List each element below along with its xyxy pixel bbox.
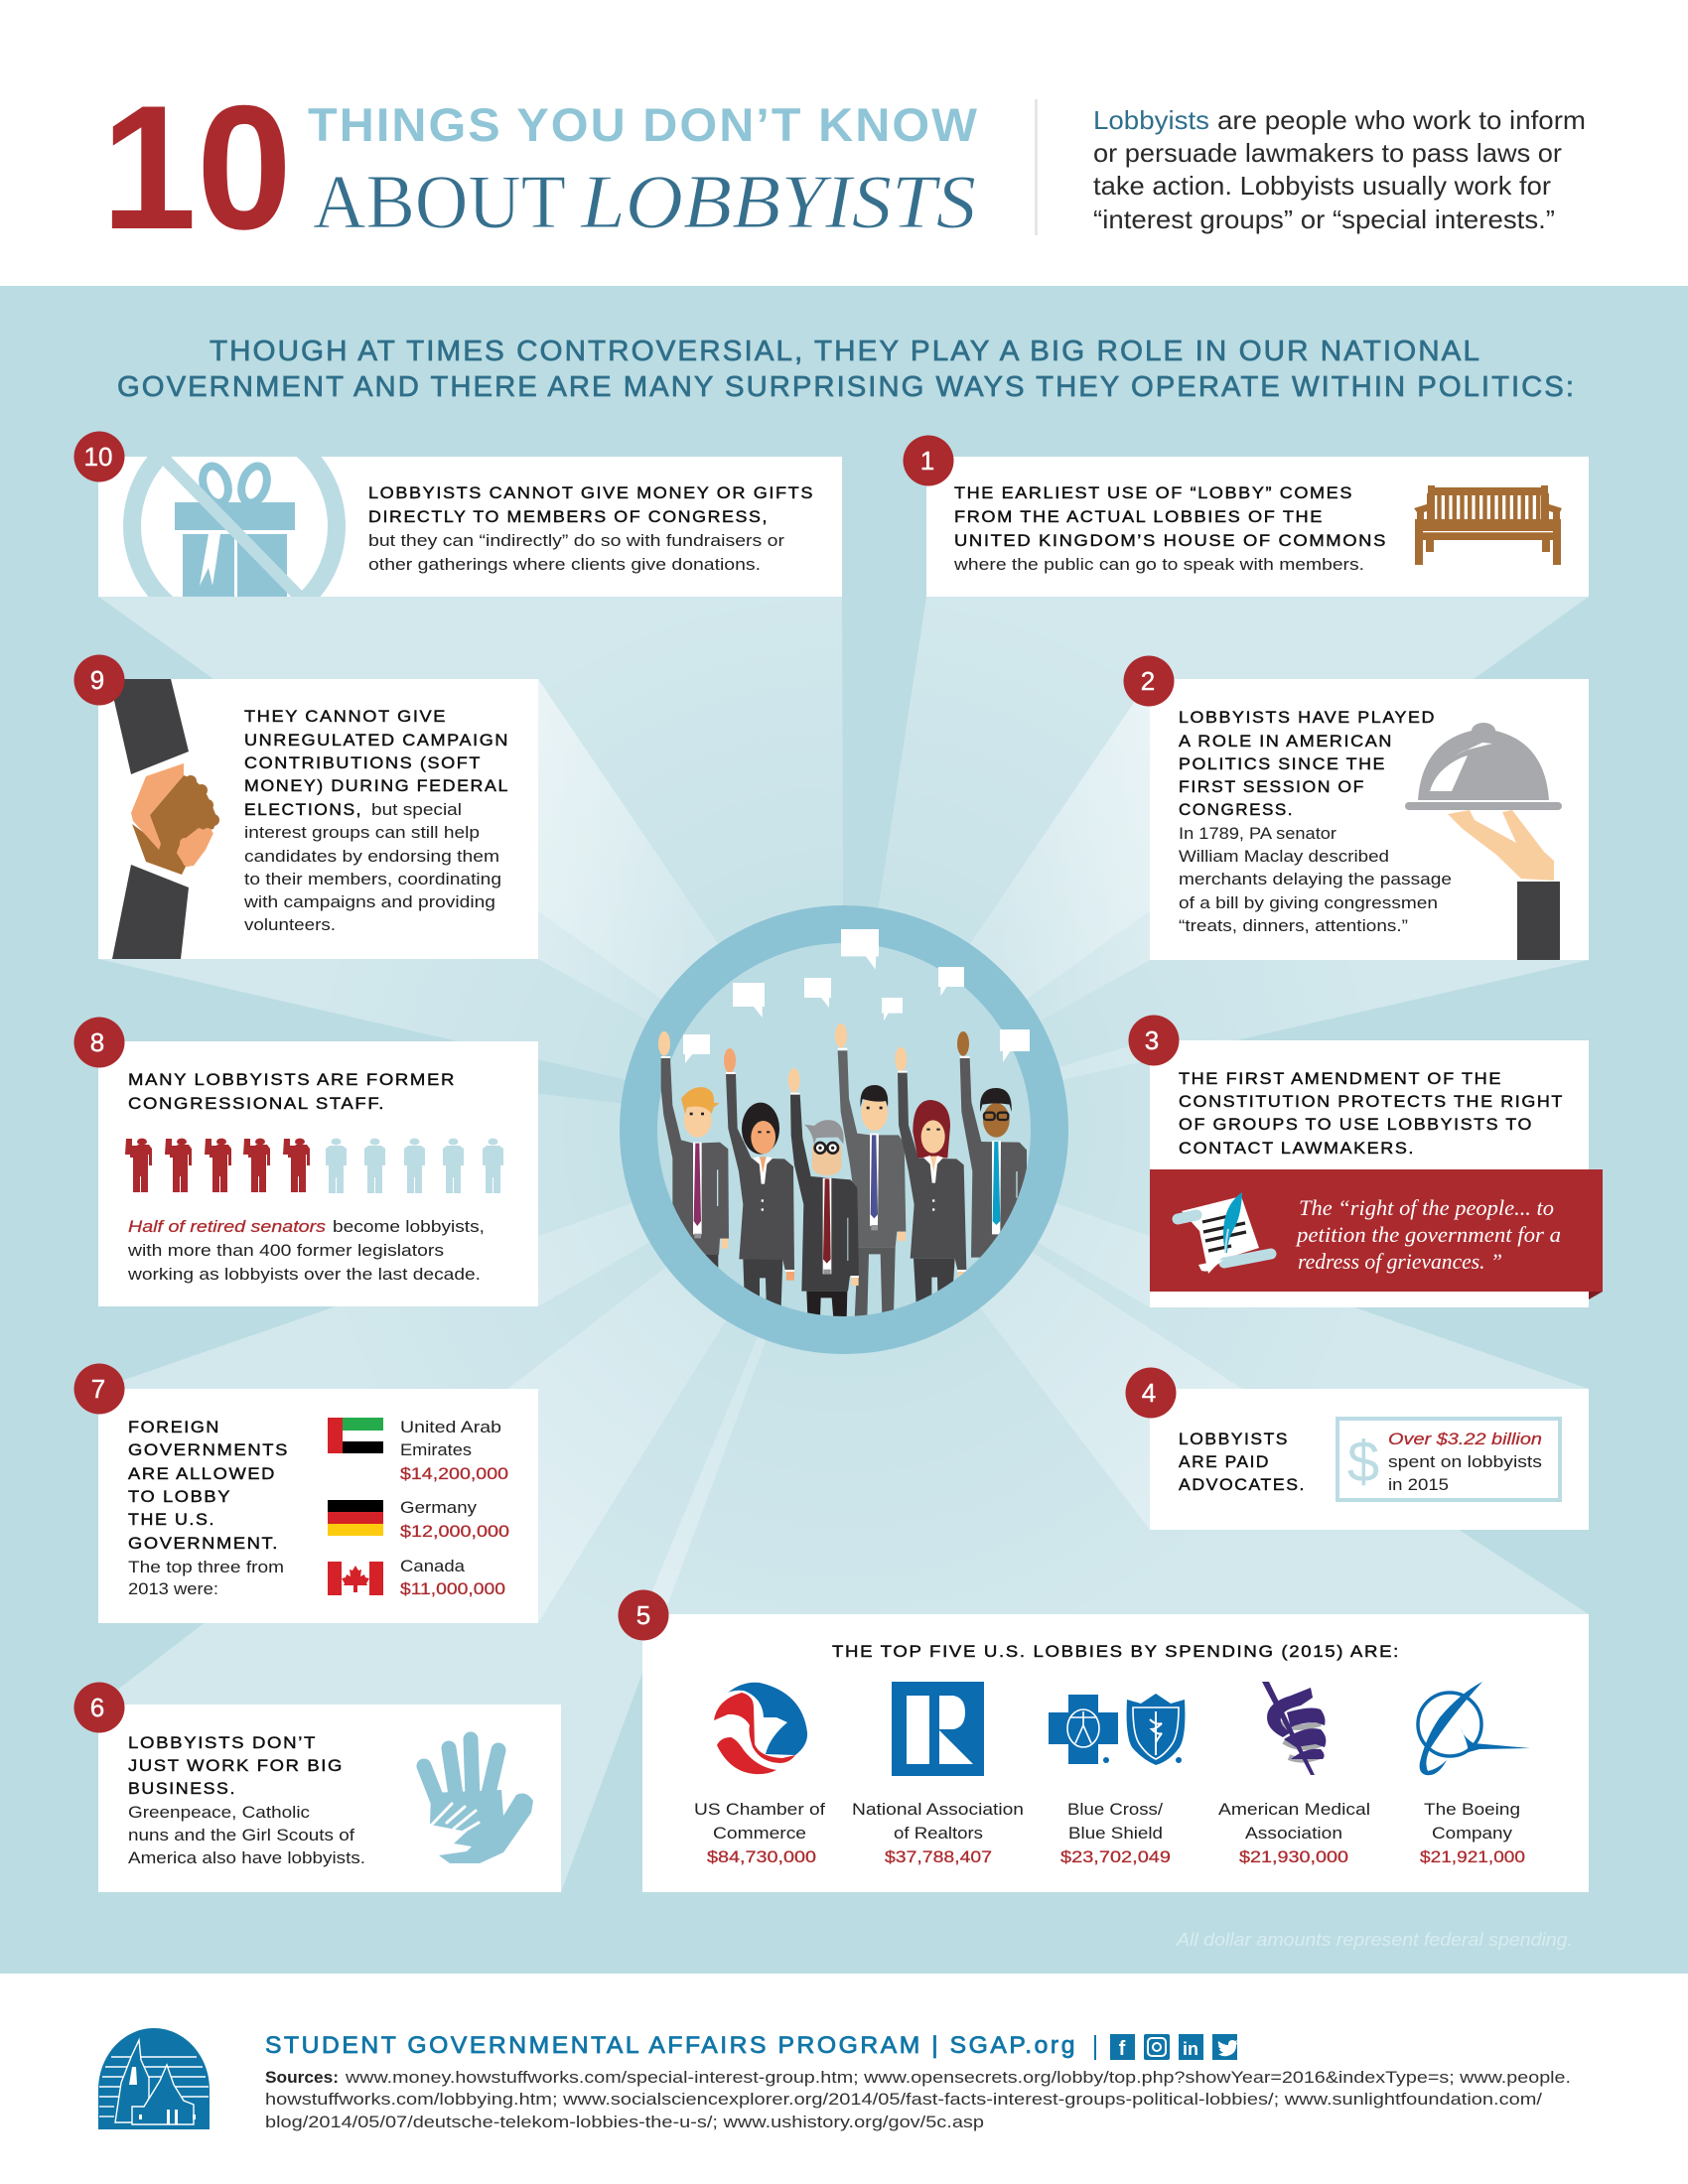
logo: US Chamber of Commerce: [714, 1683, 807, 1774]
speech bubbles: [683, 929, 1030, 1063]
country spending list: Canada: [400, 1558, 466, 1575]
badge 2: 2: [1141, 666, 1155, 696]
panel 7 text: TO LOBBY: [128, 1487, 231, 1506]
figure with teal tie and glasses: [957, 1031, 1027, 1258]
panel 2 text: William Maclay described: [1179, 848, 1389, 866]
panel 4 heading: ARE PAID: [1179, 1452, 1270, 1471]
panel 1: origin of lobby: [904, 435, 1589, 597]
badge 4: 4: [1142, 1378, 1156, 1408]
icon: facebook: f: [1119, 2038, 1126, 2060]
lobby names and spending: US Chamber of: [694, 1801, 825, 1819]
panel 8 text: with more than 400 former legislators: [127, 1242, 444, 1260]
panel 9 text: but special: [371, 801, 462, 819]
woman with red hair: [895, 1047, 966, 1303]
panel 9 text: with campaigns and providing: [243, 893, 495, 911]
panel 1 text: where the public can go to speak with members.: [953, 556, 1364, 574]
country spending list: [400, 1419, 509, 1598]
icon: twitter: [1212, 2034, 1238, 2060]
flag: Germany: [328, 1500, 383, 1536]
panel 3 text: CONTACT LAWMAKERS.: [1179, 1139, 1415, 1158]
panel 7 text: FOREIGN: [128, 1418, 220, 1436]
panel 7 text: [128, 1418, 289, 1598]
panel 2 text: CONGRESS.: [1179, 800, 1294, 819]
lobby names and spending: of Realtors: [894, 1825, 983, 1843]
panel 8 text: Half of retired senators: [128, 1217, 327, 1236]
panel 9 text: CONTRIBUTIONS (SOFT: [244, 753, 482, 772]
lobby names and spending: The Boeing: [1424, 1801, 1520, 1819]
panel 3 text: CONSTITUTION PROTECTS THE RIGHT: [1179, 1092, 1564, 1111]
panel 1 text: [953, 483, 1387, 574]
panel 6 text: JUST WORK FOR BIG: [128, 1756, 344, 1775]
flag: Canada: [328, 1562, 383, 1595]
panel 8 heading: CONGRESSIONAL STAFF.: [128, 1094, 385, 1113]
badge 5: 5: [636, 1600, 650, 1630]
panel 4: paid advocates: [1126, 1368, 1589, 1530]
panel 7 text: 2013 were:: [128, 1580, 218, 1598]
badge 5: [618, 1590, 669, 1640]
icon: hands: [424, 1739, 533, 1863]
lobby names and spending: Blue Cross/: [1067, 1801, 1163, 1819]
panel 2 text: In 1789, PA senator: [1179, 825, 1337, 843]
country spending list: Germany: [400, 1499, 478, 1517]
panel 1 text: THE EARLIEST USE OF “LOBBY” COMES: [954, 483, 1353, 502]
panel 9 text: volunteers.: [244, 916, 336, 934]
sources: howstuffworks.com/lobbying.htm; www.socialsciencexplorer.org/2014/05/fast-facts-interest-groups-political-lobbies/; www.sunlightfoundation.com/: [265, 2091, 1543, 2109]
title line: things you don't know: THINGS YOU DON’T KNOW: [308, 98, 979, 151]
panel 8 heading: MANY LOBBYISTS ARE FORMER: [128, 1070, 456, 1089]
logo: Blue Cross Blue Shield: [1049, 1694, 1185, 1765]
lobby names and spending: Company: [1432, 1825, 1513, 1843]
panel 2: history: [1124, 655, 1589, 960]
panel 6 text: [128, 1733, 365, 1867]
panel 2 text: merchants delaying the passage: [1179, 871, 1452, 888]
panel 4 heading: LOBBYISTS: [1179, 1430, 1289, 1448]
section heading: THOUGH AT TIMES CONTROVERSIAL, THEY PLAY A BIG ROLE IN OUR NATIONAL: [210, 336, 1481, 367]
quotation: petition the government for a: [1295, 1222, 1561, 1247]
icon: scroll and quill: [1178, 1192, 1271, 1274]
title line: about lobbyists: LOBBYISTS: [580, 159, 976, 244]
lobby names and spending: [694, 1801, 1525, 1866]
badge 1: [904, 435, 953, 486]
panel 9 text: ELECTIONS,: [244, 800, 362, 819]
figure with blond hair: [658, 1031, 729, 1271]
panel 2 text: [1179, 708, 1452, 935]
panel 7: foreign governments: [73, 1364, 538, 1623]
callout: spending total: [1337, 1419, 1560, 1500]
lobby names and spending: National Association: [852, 1801, 1024, 1819]
panel 2 text: LOBBYISTS HAVE PLAYED: [1179, 708, 1436, 727]
panel 10 text: DIRECTLY TO MEMBERS OF CONGRESS,: [368, 507, 769, 526]
panel 3: first amendment: [1128, 1015, 1603, 1307]
title line: about lobbyists: [313, 159, 976, 244]
badge 7: 7: [91, 1374, 105, 1404]
country spending list: $12,000,000: [400, 1522, 509, 1541]
icon: facebook: [1110, 2034, 1135, 2060]
panel 9 text: candidates by endorsing them: [244, 848, 499, 866]
country spending list: $11,000,000: [400, 1579, 505, 1598]
lobby names and spending: $23,702,049: [1060, 1847, 1171, 1866]
panel 6 text: BUSINESS.: [128, 1779, 236, 1798]
panel 7 text: GOVERNMENT.: [128, 1534, 279, 1553]
background rays: [98, 597, 1589, 1892]
lobby names and spending: American Medical: [1218, 1801, 1370, 1819]
section heading: [117, 336, 1576, 403]
center man with gray hair and glasses: [788, 1068, 859, 1318]
panel 9 text: MONEY) DURING FEDERAL: [244, 776, 509, 795]
country spending list: $14,200,000: [400, 1464, 508, 1483]
panel 9: soft money: [73, 655, 538, 959]
intro text: Lobbyists: [1093, 105, 1209, 135]
panel 6 text: LOBBYISTS DON’T: [128, 1733, 317, 1752]
lobby names and spending: $84,730,000: [707, 1847, 816, 1866]
badge 3: 3: [1145, 1025, 1159, 1055]
panel 4 heading: [1179, 1430, 1306, 1494]
panel 6: not just big business: [73, 1682, 561, 1892]
icon: linkedin: in: [1183, 2039, 1198, 2059]
sources: Sources:: [265, 2069, 339, 2087]
header: [101, 68, 1586, 266]
sources: www.money.howstuffworks.com/special-interest-group.htm; www.opensecrets.org/lobby/top.php?showYear=2016&indexType=s; www.people.: [345, 2069, 1571, 2087]
intro text: take action. Lobbyists usually work for: [1093, 171, 1551, 201]
panel 9 text: interest groups can still help: [244, 824, 480, 842]
lobby names and spending: $21,930,000: [1239, 1847, 1348, 1866]
footer: [98, 2028, 1571, 2131]
panel 10: gifts: [73, 431, 842, 597]
badge 7: [73, 1364, 125, 1414]
intro text: or persuade lawmakers to pass laws or: [1093, 138, 1562, 168]
lobbyist crowd: [658, 1024, 1027, 1318]
icon: handshake: [109, 679, 219, 959]
quotation: redress of grievances. ”: [1298, 1249, 1502, 1274]
panel 4 heading: ADVOCATES.: [1179, 1475, 1306, 1494]
panel 8: former staff: [73, 1017, 538, 1306]
quotation: [1295, 1195, 1561, 1274]
badge 9: 9: [90, 665, 104, 695]
section heading: GOVERNMENT AND THERE ARE MANY SURPRISING WAYS THEY OPERATE WITHIN POLITICS:: [117, 371, 1576, 403]
program title: STUDENT GOVERNMENTAL AFFAIRS PROGRAM | SGAP.org: [265, 2032, 1077, 2059]
logo: Boeing: [1418, 1682, 1530, 1775]
panel 10 text: other gatherings where clients give donations.: [368, 556, 761, 574]
logo: Realtor R: [892, 1682, 984, 1776]
panel 10 text: but they can “indirectly” do so with fundraisers or: [368, 532, 785, 550]
central illustration: ring and lobbyists: [638, 924, 1050, 1335]
callout text: Over $3.22 billion: [1388, 1430, 1542, 1448]
panel 9 text: to their members, coordinating: [244, 871, 501, 888]
badge 6: [73, 1682, 125, 1733]
panel 6 text: nuns and the Girl Scouts of: [128, 1827, 354, 1844]
panel 9 text: THEY CANNOT GIVE: [244, 707, 447, 726]
badge 10: 10: [84, 442, 112, 472]
lobby names and spending: $37,788,407: [885, 1847, 992, 1866]
intro text: “interest groups” or “special interests.”: [1093, 205, 1555, 234]
panel 3 text: OF GROUPS TO USE LOBBYISTS TO: [1179, 1115, 1533, 1134]
country spending list: Emirates: [400, 1441, 472, 1459]
panel 9 text: UNREGULATED CAMPAIGN: [244, 731, 509, 750]
title number 10: 10: [101, 68, 292, 266]
panel 8 text: working as lobbyists over the last decade.: [127, 1266, 481, 1284]
icon: serving cloche and hand: [1405, 723, 1562, 960]
callout text: [1388, 1430, 1542, 1494]
panel 2 text: POLITICS SINCE THE: [1179, 754, 1386, 773]
badge 4: [1126, 1368, 1176, 1418]
badge 8: [73, 1017, 125, 1068]
badge 10: [73, 431, 125, 482]
flag: UAE: [328, 1418, 383, 1453]
lobby names and spending: Blue Shield: [1068, 1825, 1163, 1843]
panel 1 text: UNITED KINGDOM’S HOUSE OF COMMONS: [954, 531, 1387, 550]
quotation: The “right of the people... to: [1299, 1195, 1554, 1220]
icon: linkedin: [1179, 2034, 1203, 2060]
pictogram: half of ten figures: [125, 1139, 503, 1193]
lobby names and spending: $21,921,000: [1420, 1847, 1525, 1866]
lobby names and spending: Association: [1245, 1825, 1342, 1843]
footnote: All dollar amounts represent federal spending.: [1176, 1930, 1573, 1950]
intro text: are people who work to inform: [1217, 105, 1586, 135]
badge 2: [1124, 655, 1174, 707]
logo: American Medical Association: [1262, 1682, 1326, 1775]
panel 8 text: become lobbyists,: [333, 1218, 485, 1236]
callout text: in 2015: [1388, 1476, 1449, 1494]
background band: [0, 286, 1688, 1974]
badge 1: 1: [920, 446, 934, 476]
panel 8 text: [127, 1217, 485, 1284]
intro text: [1093, 105, 1586, 234]
callout text: spent on lobbyists: [1388, 1453, 1542, 1471]
panel 8 heading: [128, 1070, 456, 1113]
badge 6: 6: [90, 1693, 104, 1722]
panel 2 text: of a bill by giving congressmen: [1179, 894, 1438, 912]
panel 3 text: THE FIRST AMENDMENT OF THE: [1179, 1069, 1502, 1088]
panel 7 text: GOVERNMENTS: [128, 1440, 289, 1459]
lobby names and spending: Commerce: [713, 1825, 806, 1843]
panel 5 heading: THE TOP FIVE U.S. LOBBIES BY SPENDING (2015) ARE:: [832, 1642, 1400, 1661]
panel 3 text: [1179, 1069, 1564, 1158]
badge 9: [73, 655, 125, 705]
panel 2 text: A ROLE IN AMERICAN: [1179, 732, 1393, 751]
panel 10 text: LOBBYISTS CANNOT GIVE MONEY OR GIFTS: [368, 483, 814, 502]
title line: about lobbyists: ABOUT: [313, 159, 566, 244]
panel 1 text: FROM THE ACTUAL LOBBIES OF THE: [954, 507, 1324, 526]
icon: bench: [1414, 485, 1562, 565]
badge 3: [1128, 1015, 1180, 1066]
panel 6 text: America also have lobbyists.: [128, 1849, 365, 1867]
panel 2 text: “treats, dinners, attentions.”: [1179, 917, 1408, 935]
logo: SGAP building: [98, 2028, 210, 2129]
panel 2 text: FIRST SESSION OF: [1179, 777, 1365, 796]
ribbon with quote: [1150, 1169, 1603, 1299]
panel 10 text: [368, 483, 814, 574]
panel 6 text: Greenpeace, Catholic: [128, 1804, 310, 1822]
panel 9 text: [243, 707, 509, 934]
panel 7 text: ARE ALLOWED: [128, 1464, 276, 1483]
icon: instagram: [1144, 2034, 1170, 2060]
panel 5: top five lobbies: [618, 1590, 1589, 1892]
panel 7 text: THE U.S.: [128, 1510, 215, 1529]
back figure with blue tie: [835, 1024, 906, 1318]
country spending list: United Arab: [400, 1419, 501, 1436]
icon: dollar sign: $: [1347, 1430, 1379, 1494]
badge 8: 8: [90, 1027, 104, 1057]
icon: crossed-out gift: [123, 457, 346, 597]
sources: [265, 2069, 1571, 2131]
sources: blog/2014/05/07/deutsche-telekom-lobbies-the-u-s/; www.ushistory.org/gov/5c.asp: [265, 2114, 984, 2131]
panel 7 text: The top three from: [128, 1559, 284, 1576]
woman with black hair: [724, 1048, 794, 1307]
